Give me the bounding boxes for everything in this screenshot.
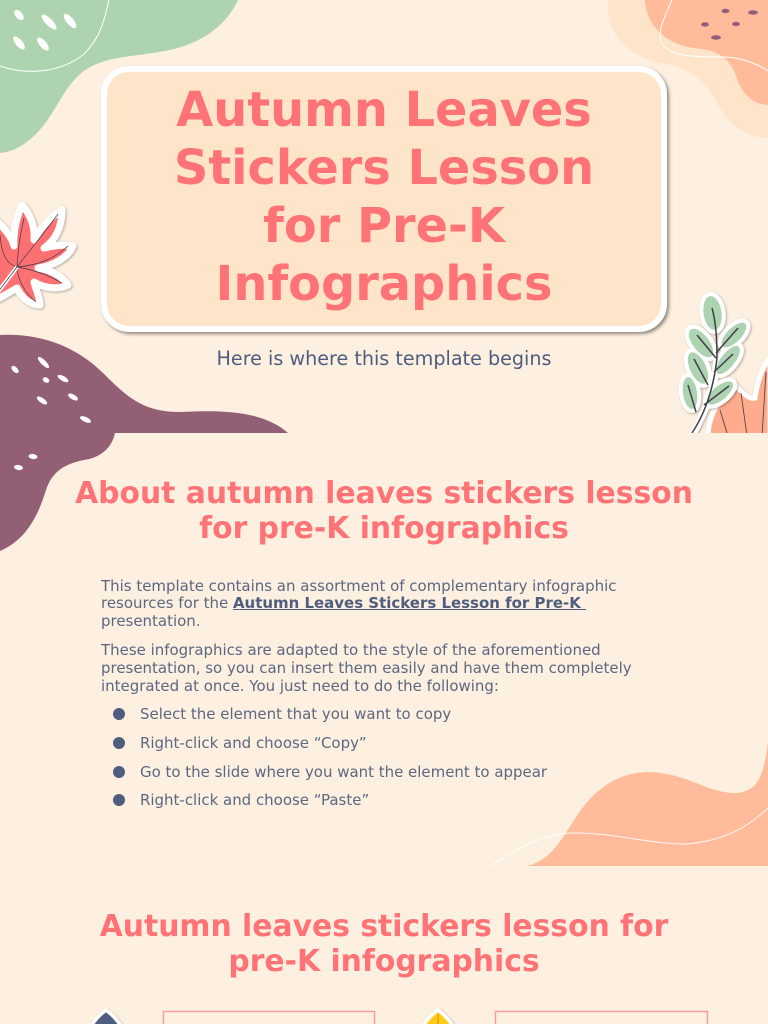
second paragraph: integrated at once. You just need to do the following: bbox=[101, 677, 499, 695]
plum blob bbox=[0, 335, 288, 551]
title: Stickers Lesson bbox=[174, 141, 594, 196]
section heading: infographics: pre-K infographics bbox=[228, 944, 540, 978]
intro paragraph: resources for the Autumn Leaves Stickers Lesson for Pre-K bbox=[101, 594, 581, 612]
bullet list: Select the element that you want to copy bbox=[140, 705, 451, 723]
intro paragraph bbox=[100, 576, 616, 630]
empty box right bbox=[496, 1012, 708, 1024]
salmon wave bottom right bbox=[490, 742, 768, 866]
empty box left bbox=[164, 1012, 374, 1024]
title: Autumn Leaves bbox=[176, 83, 592, 138]
bullet list: Right-click and choose “Paste” bbox=[140, 791, 369, 809]
icon: blue leaf bbox=[88, 1010, 124, 1024]
icon: green sprig sticker bbox=[681, 295, 750, 436]
title bbox=[174, 83, 594, 312]
second paragraph: presentation, so you can insert them easily and have them completely bbox=[101, 659, 632, 677]
title: Infographics bbox=[216, 257, 552, 312]
bullet list bbox=[113, 705, 548, 809]
section heading: infographics bbox=[100, 908, 668, 978]
second paragraph bbox=[100, 641, 632, 695]
green blob bbox=[0, 0, 238, 153]
icon: red maple leaf sticker bbox=[0, 205, 73, 305]
icon: orange leaf bush sticker bbox=[681, 295, 768, 438]
section heading: infographics: Autumn leaves stickers lesson for bbox=[100, 908, 668, 944]
intro paragraph: presentation. bbox=[101, 612, 201, 630]
section heading: about bbox=[75, 476, 693, 546]
cream and peach blobs top right bbox=[608, 0, 768, 138]
section heading: about: for pre-K infographics bbox=[199, 510, 569, 546]
subtitle: Here is where this template begins bbox=[216, 347, 552, 370]
intro paragraph: This template contains an assortment of complementary infographic bbox=[101, 576, 616, 594]
bullet list: Right-click and choose “Copy” bbox=[140, 734, 367, 752]
bullet list: Go to the slide where you want the element to appear bbox=[140, 763, 547, 781]
icon: yellow leaf bbox=[420, 1010, 456, 1024]
title: for Pre-K bbox=[263, 199, 505, 254]
section heading: about: About autumn leaves stickers lesson bbox=[75, 476, 693, 510]
second paragraph: These infographics are adapted to the style of the aforementioned bbox=[101, 641, 601, 659]
title card bbox=[101, 66, 667, 332]
